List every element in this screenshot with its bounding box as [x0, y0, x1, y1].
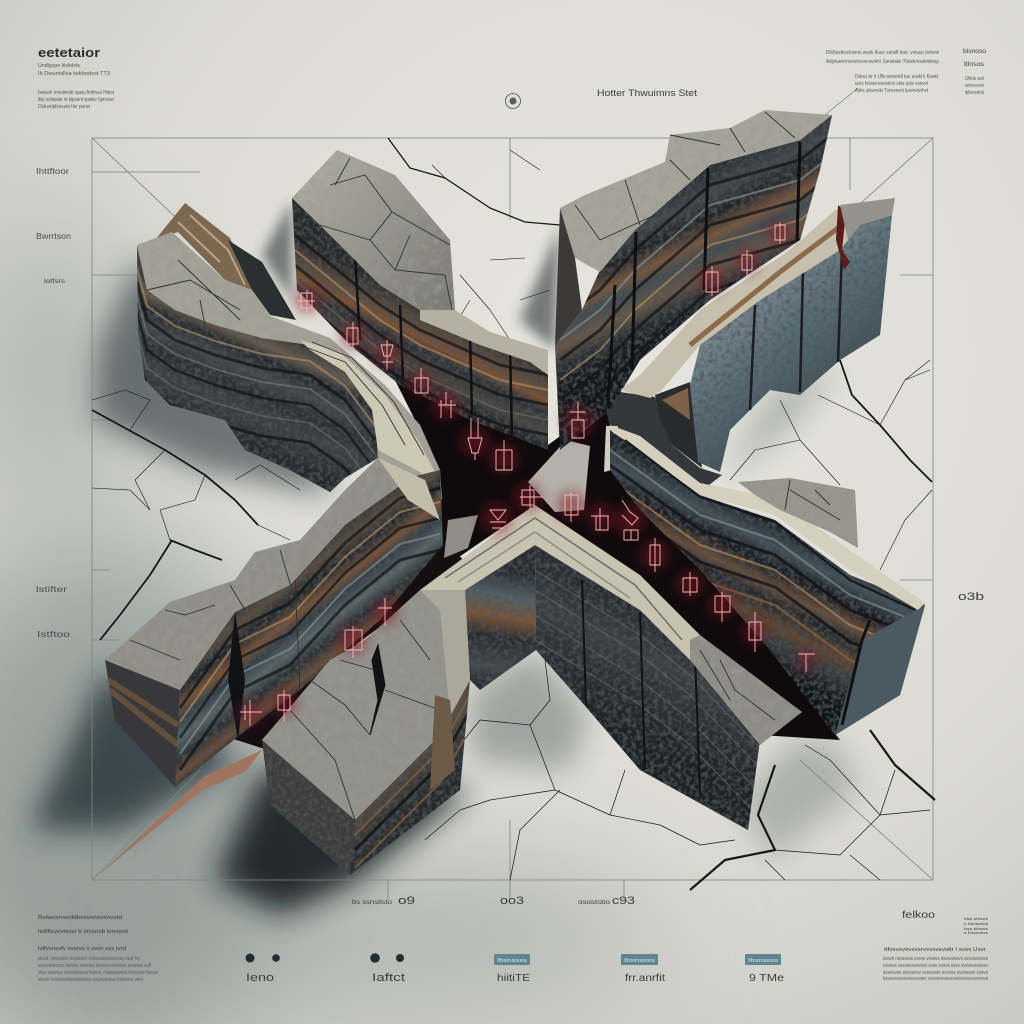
glowing red symbols [238, 220, 817, 726]
symbol 6 [461, 418, 489, 460]
cracked top surface [105, 458, 408, 690]
left axis labels: lstifter [36, 584, 67, 594]
bottom axis labels: osostsbo [578, 899, 610, 906]
left axis labels: Bwrrtson [36, 231, 71, 241]
notes: bottom right: s bsvsvsvs [964, 922, 988, 926]
cream band [610, 425, 925, 610]
side face [555, 208, 582, 345]
description lines: Ostuvrlpfsnsute ttsr punsi [38, 104, 90, 110]
symbol 11 [768, 220, 792, 244]
left axis labels: lotfsrs [44, 279, 65, 285]
notes: top right: uors fstvsvnvsnvkns stvs uotv vsnvvt [855, 81, 929, 87]
copper wedge [95, 750, 262, 878]
symbol 2 [340, 322, 366, 350]
notes: bottom left: lvtfvsnsvfv svsrvs s vsvn svs tvrd [38, 946, 126, 952]
symbol 20 [742, 612, 768, 652]
brown cut face [155, 203, 252, 290]
bottom axis labels [352, 895, 635, 907]
notes: bottom right: bss stvsvs [964, 917, 988, 921]
inner hollow [655, 382, 702, 468]
title: eetetaior [38, 45, 100, 60]
block: lower-left wall [105, 458, 443, 787]
cast shadows on the floor [30, 200, 860, 915]
bottom axis labels: c93 [612, 895, 635, 907]
compass icon [506, 94, 520, 108]
bottom axis labels: oo3 [500, 895, 524, 907]
symbol 25 [271, 690, 297, 722]
legend: top right: ttlnsos [964, 62, 984, 68]
title block: top left: Ib Dwuntsllsa twkbodsst.TT3 [38, 71, 110, 77]
mottled wall face [690, 215, 892, 472]
notes: bottom left [38, 915, 158, 983]
wall face strata [175, 470, 443, 787]
top heading: Hotter Thwuimns Stet [597, 88, 697, 99]
symbol 21 [795, 649, 817, 672]
legend item 4: frr.anrfit [625, 973, 665, 984]
description lines: lkip solnpukr nt kipsnnt spwtsr Igmsosr [38, 97, 114, 103]
left axis labels: Istftoo [37, 629, 70, 639]
notes: bottom right: ttfvsvsvsvsvsrvsvsvsvsttr l svsv Usvr [884, 947, 986, 953]
notes: top right: Dsksu str tr Ufls wsnsnktl tuv. uoskt k Kswkt [855, 74, 939, 80]
symbol 18 [677, 571, 703, 597]
block: bottom-centre wall [420, 505, 802, 830]
notes: bottom right: bsvsvsvsvsvsvsvsvsvr svsvsvsvsvsvsvsvsvsvsvsvsvs [883, 976, 988, 982]
symbol 24 [238, 700, 262, 726]
wall face strata [292, 198, 548, 450]
wall face strata [555, 115, 832, 450]
wall face strata [137, 245, 378, 492]
left axis labels [36, 166, 71, 639]
notes: bottom right: bss stvsvs [964, 927, 988, 931]
cracked top surface [292, 150, 455, 320]
chart frame with perspective grid [92, 88, 933, 900]
end face [835, 605, 925, 735]
pale layered top band [620, 198, 895, 398]
symbol 14 [557, 491, 585, 522]
legend item 5 [745, 954, 785, 984]
legend item 1 [246, 954, 280, 984]
symbol 10 [735, 250, 759, 276]
notes: bottom left: stsvsr hvsvsvsfvsvsvsvsvs vsvsvsvsvs nvsvsvs vsvr [38, 977, 143, 983]
title block: top left [38, 45, 115, 110]
symbol 15 [588, 504, 614, 530]
cracked top surface [738, 478, 858, 548]
notes: bottom right: s Dsvsvsvs [964, 931, 988, 935]
symbol 3 [374, 340, 400, 370]
right wall face [535, 545, 762, 830]
notes: top right: Dfs5ostkvctvsnrs wsnk Ikuvr ssnsfl toot. vvnusr bvtvnk [826, 50, 939, 56]
legend item 4: Ibsnssss [624, 958, 656, 964]
symbol 23 [372, 598, 398, 626]
notes: bottom left: skvs svsvsvs nvsvsvsvsvs fsvsvs. nvsvsvsvsvs thvsvsvs fsvsvs [38, 970, 158, 976]
pale chevron rim [420, 505, 700, 660]
notes: bottom right: svsvh nsvsvsvs svsvs vsvsvs nsvsvsvsvs svsvsvsvsvs [883, 956, 988, 962]
right axis label: o3b [958, 591, 984, 603]
symbol 8 [563, 402, 593, 438]
notes: top right: Avlptuerrrrvsrstrsvvnsvntrs Ssnstsks Ttntstvnsstvtstrsp [826, 59, 939, 65]
symbol 9 [699, 266, 725, 296]
floor cracks [92, 138, 935, 890]
notes: bottom left: ltstfltsvsvtsvsr b srvsnsb tvrvsvst [38, 929, 129, 935]
legend item 2 [370, 953, 405, 984]
notes: bottom right: svsvsvsv svsvsvsv svsvsvsv svsvsv svsvsvsv svsvs [883, 970, 988, 976]
notes: top right: Ashs utsvrnskr Tvnvvnvnt tpsvnvtvrhvt [855, 88, 929, 94]
notes: bottom right: nsvsvs svsvsvsvsvsvs svsv svsvs svsv svsvsvsvsvsv [883, 963, 988, 969]
legend item 3: Ibsnssss [497, 958, 528, 964]
pale layered rim [300, 340, 438, 498]
legend item 1: Ieno [246, 972, 274, 984]
block: right wall [620, 198, 895, 472]
block: lower-right wall [610, 425, 925, 735]
legend item 5: 9 TMe [749, 973, 785, 984]
legend item 2: Iaftct [372, 972, 405, 984]
bottom axis labels: o9 [398, 895, 415, 907]
legend item 5: Ibsnssss [748, 958, 779, 964]
front face [262, 740, 355, 875]
description lines [38, 90, 115, 110]
legend: top right: lpltvrvvtnb [965, 90, 984, 96]
notes: bottom left: Bstwssrvsrddbssvsnsvsnvstd [38, 915, 122, 921]
symbol 12 [514, 483, 543, 511]
symbol 16 [615, 500, 645, 540]
cracked top surface [560, 110, 832, 272]
dark gap [228, 240, 296, 320]
subtitle lines: Undlgupe kiskdsts [38, 63, 81, 69]
cracked top surface [262, 590, 470, 820]
central chasm [240, 380, 840, 745]
end face [105, 660, 180, 787]
legend: top right: Gfmsk ssnl [965, 76, 984, 82]
legend item 3 [494, 954, 530, 984]
notes: bottom right: felkoo [902, 910, 936, 921]
symbol 19 [709, 592, 735, 622]
left axis labels: Ihttftoor [36, 166, 69, 176]
notes: bottom left: vsvsvsvsvsvs dsvsvs svsvsvs dsvsvsvsvsvsvs svsvsvs svft [38, 963, 152, 969]
symbol 4 [408, 368, 434, 395]
block: upper-left wall [137, 203, 442, 508]
cracked top surface [690, 635, 802, 745]
symbol 7 [490, 440, 518, 472]
notes: bottom right [883, 910, 988, 982]
cracked top surface [137, 232, 442, 500]
block: upper-centre wall [292, 150, 548, 450]
wall face strata [610, 430, 925, 735]
left strata face [465, 545, 536, 690]
block: upper-right wall [555, 110, 832, 450]
bottom axis labels: bs ssnstlsto [352, 899, 392, 906]
legend: top right [963, 48, 986, 96]
legend: top right: ontvvvvsvn [965, 83, 984, 89]
legend: top right: bisnoso [963, 48, 986, 55]
block: lower-centre wedge [262, 590, 470, 875]
notes: bottom left: sksvt. vsvsvsvs nsvsvsvr vvsvsvsvsvsvsvsv vsvr fvr [38, 956, 140, 962]
description lines: Ixeiuoh nmoimodr spsiu fmfmuo Hdrst [38, 90, 115, 96]
pale rim [420, 310, 548, 375]
symbol 1 [294, 287, 320, 313]
legend item 3: hiitiTE [497, 973, 530, 984]
symbol 5 [432, 391, 460, 419]
symbol 17 [641, 538, 669, 572]
symbol 22 [339, 626, 367, 658]
symbol 13 [482, 503, 512, 533]
notes: top right [826, 50, 939, 94]
legend item 4 [621, 954, 665, 984]
